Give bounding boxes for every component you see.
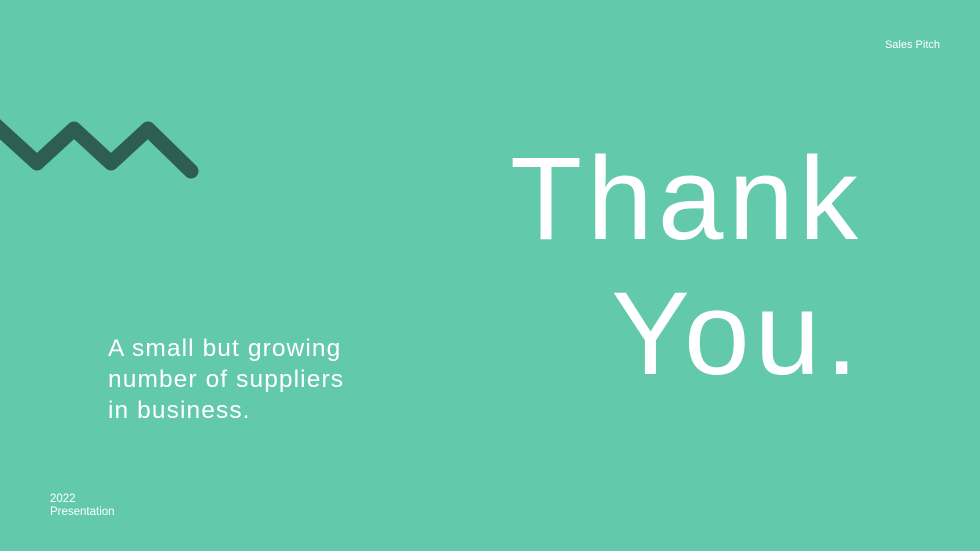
icon: zigzag <box>0 119 198 178</box>
title: Thank You: You. <box>611 268 863 400</box>
text block: tagline: number of suppliers <box>108 366 344 393</box>
title: Thank You <box>510 133 863 400</box>
text block: tagline: A small but growing <box>108 335 341 362</box>
label: year presentation: Presentation <box>50 506 115 518</box>
label: year presentation <box>50 493 115 518</box>
title: Thank You: Thank <box>510 133 863 265</box>
text block: tagline: in business. <box>108 397 251 424</box>
label: sales pitch: Sales Pitch <box>885 39 940 51</box>
label: year presentation: 2022 <box>50 493 76 505</box>
text block: tagline <box>108 335 344 424</box>
